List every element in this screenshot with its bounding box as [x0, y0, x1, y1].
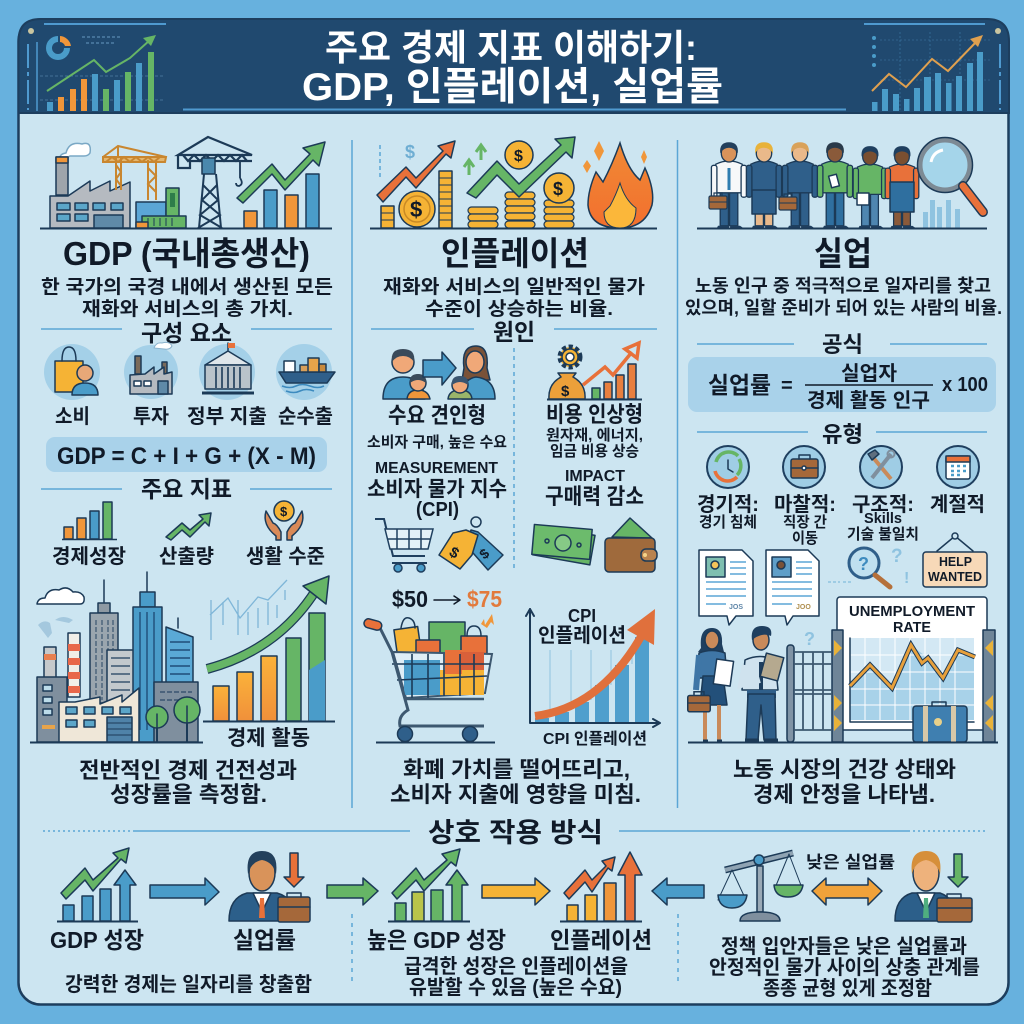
- title: GDP, 인플레이션, 실업률: [302, 66, 723, 109]
- label: demand pull: 수요 견인형: [388, 403, 486, 428]
- illustration: coins and flame: $: [514, 148, 523, 165]
- definition: unemployment: [685, 276, 1002, 318]
- label: cost push: 비용 인상형: [546, 402, 643, 427]
- icon: job search: ?: [858, 554, 869, 574]
- subheading: types: 유형: [822, 422, 863, 447]
- illustration: gate: [787, 629, 832, 742]
- arrow: orange double: [812, 878, 882, 905]
- label: high GDP growth: 높은 GDP 성장: [367, 927, 506, 953]
- icon: price tags: $: [476, 545, 492, 562]
- illustration: full shopping cart: [363, 618, 495, 742]
- label: economic activity: 경제 활동: [227, 727, 310, 750]
- label: cost push: [546, 402, 643, 460]
- label: impact: IMPACT: [565, 468, 625, 485]
- heading: inflation: 인플레이션: [441, 235, 589, 272]
- header chart right: [872, 28, 1001, 111]
- heading: interactions: 상호 작용 방식: [428, 818, 603, 848]
- label: living standard: 생활 수준: [246, 545, 325, 568]
- label: net exports: 순수출: [278, 405, 333, 428]
- icon: growth bars: [62, 502, 117, 540]
- summary: unemployment: [733, 757, 956, 807]
- chart: economic activity: [203, 576, 335, 722]
- label: unemployment rate: 실업률: [233, 927, 296, 953]
- illustration: industry and growth: [40, 137, 332, 228]
- heading: GDP: GDP (국내총생산): [63, 235, 310, 272]
- definition: GDP: 재화와 서비스의 총 가치.: [82, 298, 293, 320]
- icon: price tags: [439, 517, 503, 570]
- summary: unemployment: 경제 안정을 나타냄.: [753, 782, 935, 807]
- chart: CPI inflation: 인플레이션: [538, 624, 626, 647]
- icon: government spending: [199, 343, 255, 400]
- icon: high GDP growth: [388, 849, 470, 922]
- label: low unemployment: 낮은 실업률: [806, 853, 895, 872]
- subheading: formula: 공식: [822, 332, 863, 357]
- definition: inflation: 재화와 서비스의 일반적인 물가: [383, 276, 645, 298]
- icon: living standard: [265, 501, 303, 540]
- label: frictional: [774, 493, 836, 547]
- icon: price tags: $: [446, 544, 462, 563]
- chart: unemployment rate board: [832, 597, 995, 742]
- icon: investment: [124, 342, 178, 399]
- chart: CPI inflation: [526, 606, 660, 748]
- illustration: woman with briefcase: [688, 628, 734, 741]
- icon: wallet: [605, 518, 657, 572]
- label: demand pull: 소비자 구매, 높은 수요: [367, 434, 507, 451]
- illustration: gate: ?: [804, 629, 815, 649]
- formula: unemployment: 실업률: [708, 372, 771, 398]
- icon: job search: [828, 546, 909, 587]
- icon: unemployment person: [229, 851, 310, 922]
- illustration: man with clipboard: [741, 626, 784, 740]
- definition: unemployment: 노동 인구 중 적극적으로 일자리를 찾고: [695, 276, 991, 296]
- text: rapid growth: 유발할 수 있음 (높은 수요): [409, 976, 622, 999]
- icon: shopping cart: [375, 519, 433, 572]
- summary: GDP: 성장률을 측정함.: [110, 782, 267, 807]
- panel: GDP: [30, 137, 335, 807]
- icon: consumption: [44, 344, 100, 400]
- chart: CPI inflation: CPI 인플레이션: [543, 730, 647, 748]
- arrow: orange right: [482, 878, 550, 905]
- summary: GDP: 전반적인 경제 건전성과: [79, 758, 297, 783]
- panel: inflation: [363, 137, 660, 807]
- title: 주요 경제 지표 이해하기:: [325, 27, 697, 68]
- label: government spending: 정부 지출: [187, 405, 267, 428]
- subheading: components: 구성 요소: [141, 320, 232, 346]
- illustration: coins and flame: $: [553, 179, 563, 199]
- header chart left: [28, 28, 165, 111]
- panel: unemployment: [685, 138, 1002, 807]
- icon: demand pull: [383, 346, 495, 399]
- chart: unemployment rate board: UNEMPLOYMENT: [849, 603, 975, 620]
- label: impact: 구매력 감소: [545, 484, 644, 509]
- definition: inflation: 수준이 상승하는 비율.: [425, 298, 613, 320]
- definition: inflation: [383, 276, 645, 320]
- text: rapid growth: 급격한 성장은 인플레이션을: [404, 955, 628, 978]
- label: measurement: [367, 460, 507, 521]
- text: rapid growth: [404, 955, 628, 999]
- icon: output arrow: [166, 513, 211, 540]
- illustration: coins and flame: $: [410, 197, 422, 222]
- label: price change: $50: [392, 586, 428, 612]
- label: price change: $75: [467, 586, 502, 612]
- dashed divider: [513, 348, 515, 572]
- icon: GDP growth: [57, 848, 138, 922]
- label: measurement: MEASUREMENT: [375, 460, 498, 477]
- icon: living standard: $: [280, 504, 288, 519]
- summary: inflation: [390, 757, 641, 807]
- label: cyclical: 경기 침체: [699, 514, 757, 531]
- icon: cost push: $: [561, 383, 570, 400]
- summary: GDP: [79, 758, 297, 807]
- icon: seasonal: [937, 446, 979, 488]
- label: output: 산출량: [159, 545, 214, 568]
- text: policy tradeoff: 안정적인 물가 사이의 상충 관계를: [709, 956, 980, 979]
- subheading: key indicators: 주요 지표: [141, 476, 232, 502]
- arrow: blue right: [150, 878, 219, 905]
- definition: GDP: [41, 276, 333, 320]
- sign: help wanted: HELP: [939, 555, 972, 569]
- icon: frictional: [783, 446, 825, 488]
- icon: banknotes: [532, 524, 595, 565]
- icon: policymaker person: [895, 851, 972, 922]
- label: frictional: 이동: [792, 530, 818, 547]
- icon: cost push: [547, 343, 642, 400]
- label: frictional: 직장 간: [783, 514, 827, 531]
- illustration: coins and flame: [370, 137, 657, 228]
- label: price change: [392, 586, 502, 628]
- icon: job search: ?: [891, 546, 903, 567]
- icon: resume one: JOS: [729, 604, 743, 611]
- panel: interactions: [43, 818, 988, 1000]
- label: economic growth: 경제성장: [52, 545, 126, 568]
- ground line: [688, 742, 998, 744]
- heading: unemployment: 실업: [814, 235, 872, 272]
- icon: job search: !: [904, 570, 909, 587]
- formula: GDP: GDP = C + I + G + (X - M): [57, 443, 316, 470]
- text: policy tradeoff: 종종 균형 있게 조정함: [763, 977, 932, 1000]
- illustration: city: [30, 572, 203, 742]
- icon: balance scale: [718, 853, 803, 921]
- summary: inflation: 소비자 지출에 영향을 미침.: [390, 782, 641, 807]
- header banner: [18, 19, 1009, 113]
- arrow: green right: [327, 878, 378, 905]
- summary: unemployment: 노동 시장의 건강 상태와: [733, 757, 956, 782]
- label: structural: [847, 493, 919, 543]
- dashed section dividers: [352, 914, 678, 985]
- label: measurement: 소비자 물가 지수: [367, 478, 507, 501]
- chart: unemployment rate board: RATE: [893, 619, 931, 636]
- summary: inflation: 화폐 가치를 떨어뜨리고,: [403, 757, 630, 782]
- label: cyclical: [697, 493, 759, 531]
- label: demand pull: [367, 403, 507, 451]
- label: consumption: 소비: [55, 405, 90, 428]
- chart: CPI inflation: CPI: [568, 606, 596, 626]
- label: GDP growth: GDP 성장: [50, 927, 144, 953]
- sign: help wanted: [923, 533, 987, 587]
- title: [302, 27, 723, 109]
- formula: unemployment: [688, 357, 996, 412]
- label: cost push: 원자재, 에너지,: [546, 427, 643, 444]
- formula: unemployment: =: [781, 375, 793, 397]
- icon: resume two: JOO: [796, 604, 811, 611]
- label: investment: 투자: [133, 405, 169, 428]
- definition: unemployment: 있으며, 일할 준비가 되어 있는 사람의 비율.: [685, 298, 1002, 318]
- sign: help wanted: WANTED: [928, 570, 982, 584]
- text: policy tradeoff: [709, 935, 980, 1000]
- icon: cyclical: [707, 446, 749, 488]
- column dividers: [352, 140, 678, 808]
- formula: unemployment: 경제 활동 인구: [807, 389, 930, 412]
- label: inflation: 인플레이션: [550, 927, 652, 953]
- label: structural: 구조적:: [852, 493, 914, 516]
- label: seasonal: 계절적: [930, 493, 985, 516]
- arrow: blue left: [652, 878, 704, 905]
- subheading: causes: 원인: [493, 319, 535, 345]
- icon: structural: [860, 446, 902, 488]
- label: measurement: (CPI): [416, 499, 459, 521]
- label: structural: Skills: [864, 510, 902, 527]
- illustration: coins and flame: $: [405, 142, 415, 162]
- label: impact: [545, 468, 644, 509]
- icon: resume one: [699, 550, 753, 625]
- label: frictional: 마찰적:: [774, 493, 836, 516]
- text: policy tradeoff: 정책 입안자들은 낮은 실업률과: [721, 935, 967, 958]
- illustration: job seekers: [697, 138, 987, 228]
- formula: unemployment: x 100: [942, 374, 988, 396]
- icon: net exports: [276, 344, 335, 400]
- label: cost push: 임금 비용 상승: [550, 443, 639, 460]
- icon: resume two: [766, 550, 819, 625]
- icon: inflation rise: [560, 852, 642, 922]
- text: strong economy: 강력한 경제는 일자리를 창출함: [65, 973, 312, 996]
- label: cyclical: 경기적:: [697, 493, 759, 516]
- label: structural: 기술 불일치: [847, 526, 919, 543]
- definition: GDP: 한 국가의 국경 내에서 생산된 모든: [41, 276, 333, 298]
- formula: unemployment: 실업자: [841, 362, 897, 385]
